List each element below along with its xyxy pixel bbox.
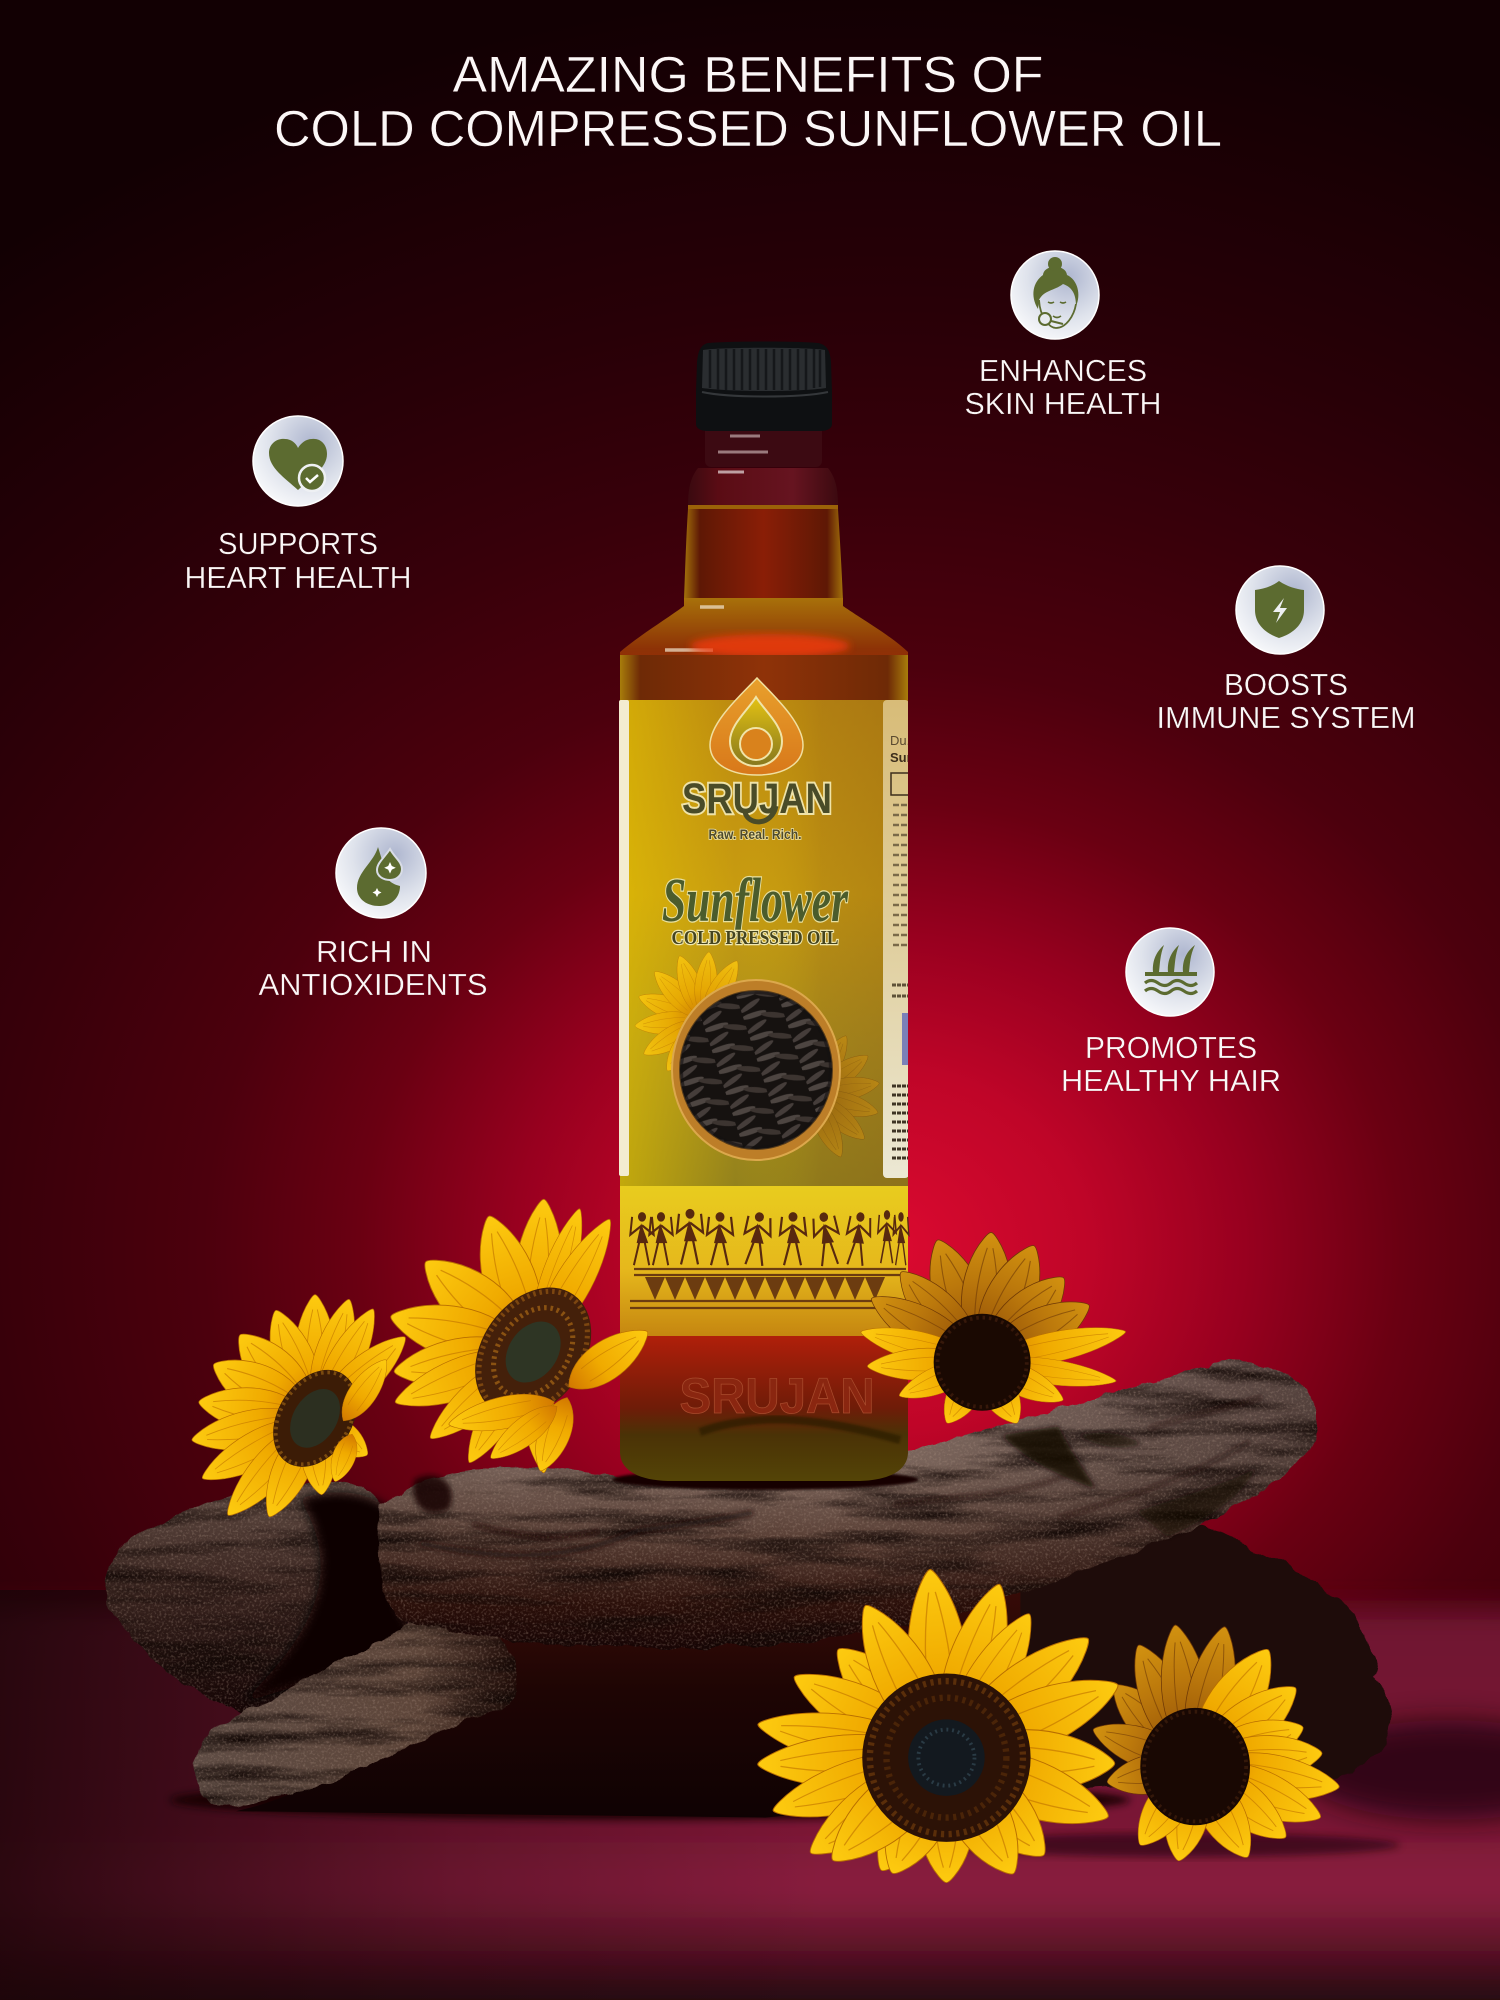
label: [258, 934, 488, 1002]
icon: oil drops: [336, 828, 426, 918]
benefit: skin health: [964, 251, 1162, 421]
right side nutrition label: [883, 700, 908, 1178]
icon: hair follicles: [1126, 928, 1214, 1016]
title: COLD COMPRESSED SUNFLOWER OIL: [274, 100, 1222, 157]
sunflower: large bottom: [754, 1567, 1129, 1888]
title: AMAZING BENEFITS OF: [452, 46, 1044, 103]
glass base with oil: [620, 1336, 908, 1481]
logo: oil drop: [710, 678, 803, 775]
back-left rock: [104, 1483, 421, 1712]
shadow gap between rocks: [242, 1492, 427, 1703]
label: BOOSTS: [1224, 667, 1348, 702]
sunflower: bottom right: [1087, 1622, 1342, 1868]
label sunflower art: [634, 951, 881, 1161]
label: ENHANCES: [979, 353, 1147, 388]
label: [184, 526, 412, 595]
driftwood pile: [104, 1362, 1395, 1818]
base glints: [700, 1420, 900, 1440]
seed bowl: [672, 980, 840, 1160]
dancing figures: [630, 1209, 909, 1267]
log cracks and shadows: [413, 1397, 1263, 1555]
bottle neck: [684, 425, 843, 600]
floor surface: [0, 1590, 1500, 2000]
back-right dark rock: [1008, 1524, 1395, 1792]
label: ANTIOXIDENTS: [258, 967, 488, 1002]
label: [1061, 1030, 1281, 1098]
bottle cap: [696, 342, 832, 431]
decorative tribal band: [620, 1186, 909, 1336]
underside of main log: [236, 1562, 1020, 1818]
triangle pattern: [630, 1269, 906, 1308]
icon: heart with check: [253, 416, 343, 506]
right side nutrition label: Du.: [890, 733, 910, 748]
brand name: SRUJAN: [682, 775, 832, 823]
product subtitle: COLD PRESSED OIL: [672, 927, 838, 949]
right side nutrition label: Sun: [890, 750, 915, 765]
benefit: healthy hair: [1061, 928, 1281, 1098]
benefit: heart health: [184, 416, 412, 595]
benefit: immune system: [1156, 566, 1416, 735]
label: HEALTHY HAIR: [1061, 1063, 1281, 1098]
sunflowers: [189, 1198, 1342, 1888]
label: SKIN HEALTH: [964, 386, 1162, 421]
label: [964, 353, 1162, 421]
shoulder glints: [620, 607, 908, 701]
label: SUPPORTS: [218, 526, 378, 561]
label: [1156, 667, 1416, 735]
title: [274, 46, 1222, 157]
embossed brand on glass: SRUJAN: [680, 1368, 874, 1424]
left side paper label: [619, 700, 629, 1176]
label: PROMOTES: [1085, 1030, 1257, 1065]
icon: shield with bolt: [1236, 566, 1324, 654]
sunflower: behind bottle right: [857, 1231, 1129, 1432]
oil bottle: [619, 342, 915, 1481]
label: IMMUNE SYSTEM: [1156, 700, 1416, 735]
product name: Sunflower: [662, 867, 849, 935]
bottle contact shadow: [612, 1469, 918, 1490]
label: HEART HEALTH: [184, 560, 412, 595]
benefit: antioxidants: [258, 828, 488, 1002]
sunflower: large left: [384, 1198, 658, 1476]
bottle shoulder: [620, 598, 908, 700]
front label: [620, 700, 908, 1186]
icon: face: [1011, 251, 1099, 339]
main driftwood log: [378, 1362, 1318, 1648]
label: RICH IN: [316, 934, 432, 969]
front-left log leg: [196, 1601, 518, 1806]
sunflower: small left: [189, 1294, 417, 1527]
brand tagline: Raw. Real. Rich.: [708, 826, 802, 842]
